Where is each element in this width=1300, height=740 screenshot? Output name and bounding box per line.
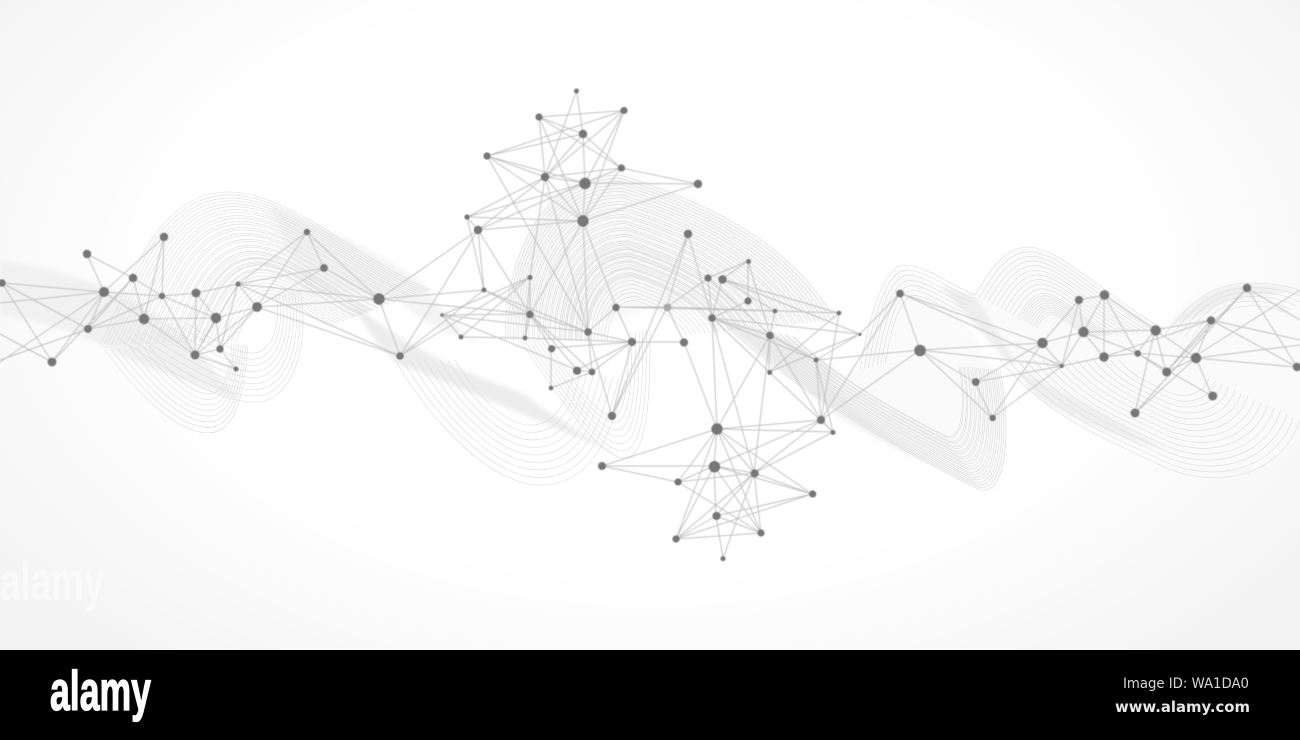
lobe E2: [520, 330, 650, 458]
lobe E: [395, 360, 625, 485]
edges: middle cluster: [442, 234, 920, 473]
nodes: middle cluster: [440, 230, 862, 435]
lobe G: [860, 265, 975, 370]
lobe H: [975, 247, 1165, 337]
nodes: right cluster: [896, 284, 1300, 421]
lobe I: [1000, 360, 1300, 478]
network nodes: [0, 88, 1300, 561]
nodes: top cluster: [464, 88, 702, 234]
lobe A: [100, 192, 430, 345]
edges: left cluster: [0, 230, 530, 369]
lobe D: [505, 175, 835, 340]
logo: alamy: [50, 659, 151, 722]
edges: lower cluster: [602, 420, 833, 558]
ribbon band fills: [0, 172, 1300, 491]
image id: Image ID: WA1DA0: [1123, 676, 1249, 692]
lobe F: [720, 320, 1006, 490]
watermark: alamy: [0, 550, 104, 612]
network edges: [0, 91, 1300, 558]
nodes: lower cluster: [598, 423, 816, 561]
edges: right cluster: [821, 288, 1300, 420]
lobe J: [1165, 283, 1300, 337]
website: www.alamy.com: [1115, 698, 1250, 716]
wave ribbon: [0, 172, 1300, 491]
lobe C: [105, 343, 248, 433]
lobe B: [120, 290, 303, 402]
edges: top cluster: [467, 91, 698, 332]
nodes: left cluster: [0, 229, 404, 372]
footer bar: [0, 650, 1300, 740]
